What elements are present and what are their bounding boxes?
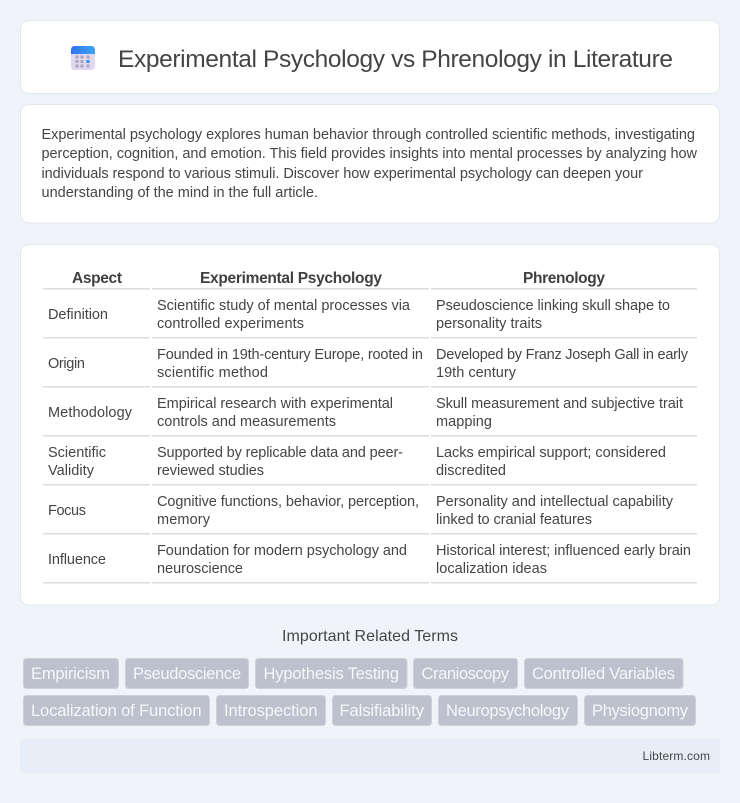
tag: Localization of Function: Localization of Function [31,702,202,720]
row: Methodology: controls and measurements [157,414,336,430]
related terms tags [24,658,696,726]
row: Influence: Historical interest; influenced early brain [436,543,691,559]
row: Definition: Definition [48,307,108,323]
row: Methodology: Methodology [48,405,133,421]
row: Definition: personality traits [436,316,542,332]
tag: Pseudoscience [126,658,248,688]
tag: Falsifiability: Falsifiability [340,702,425,720]
row: Focus: Focus [48,503,86,519]
row: Origin: Origin [48,356,85,372]
row: Origin [43,347,697,388]
row: Focus: memory [157,512,211,528]
table header: Phrenology [523,270,605,287]
row: Influence: localization ideas [436,561,547,577]
row: Scientific Validity: Lacks empirical support; considered [436,445,666,461]
row: Definition: controlled experiments [157,316,304,332]
row: Origin: 19th century [436,365,517,381]
tag: Physiognomy [584,696,696,726]
intro text: understanding of the mind in the full article. [42,185,318,201]
row: Influence [43,543,697,584]
row: Focus: Personality and intellectual capability [436,494,674,510]
title: Experimental Psychology vs Phrenology in Literature [118,46,673,73]
table header: Experimental Psychology [200,270,382,287]
row: Influence: Foundation for modern psychology and [157,543,407,559]
tag: Empiricism: Empiricism [31,665,110,683]
tag: Introspection: Introspection [224,702,318,720]
row: Focus [43,494,697,534]
row: Scientific Validity: reviewed studies [157,463,264,479]
tag: Pseudoscience: Pseudoscience [133,665,241,683]
row: Methodology: Skull measurement and subjective trait [436,396,683,412]
tag: Neuropsychology [438,696,578,726]
panel: introduction [20,104,720,223]
tag: Introspection [216,696,326,726]
table header [43,270,697,290]
tag: Hypothesis Testing: Hypothesis Testing [264,665,399,683]
footer [20,739,720,773]
heading: related terms: Important Related Terms [282,628,458,645]
table header: Aspect [72,270,122,287]
row: Methodology [43,396,697,436]
intro text [42,127,698,201]
tag: Controlled Variables [524,658,683,688]
row: Focus: linked to cranial features [436,512,592,528]
row: Focus: Cognitive functions, behavior, perception, [157,494,419,510]
row: Scientific Validity: Supported by replicable data and peer- [157,445,403,461]
row: Origin: Developed by Franz Joseph Gall in early [436,347,689,363]
tag: Falsifiability [332,696,432,726]
row: Definition: Pseudoscience linking skull shape to [436,298,670,314]
tag: Cranioscopy [414,658,518,688]
intro text: Experimental psychology explores human behavior through controlled scientific methods, investigating [42,127,695,143]
row: Scientific Validity: Scientific [48,445,106,461]
tag: Controlled Variables: Controlled Variables [532,665,675,683]
tag: Neuropsychology: Neuropsychology [446,702,570,720]
panel: comparison table [20,244,720,605]
row: Methodology: Empirical research with experimental [157,396,393,412]
row: Influence: Influence [48,552,106,568]
title panel [20,20,720,94]
row: Scientific Validity: Validity [48,463,95,479]
row: Scientific Validity: discredited [436,463,506,479]
row: Origin: scientific method [157,365,268,381]
tag: Hypothesis Testing [256,658,407,688]
row: Methodology: mapping [436,414,492,430]
tag: Empiricism [24,658,118,688]
intro text: individuals respond to various stimuli. Discover how experimental psychology can deepen your [42,166,643,182]
row: Scientific Validity [43,445,697,486]
row: Origin: Founded in 19th-century Europe, rooted in [157,347,423,363]
tag: Cranioscopy: Cranioscopy [422,665,510,683]
tag: Physiognomy: Physiognomy [592,702,689,720]
tag: Localization of Function [24,696,210,726]
row: Definition [43,298,697,338]
footer: Libterm.com [642,749,710,763]
icon: calendar [71,46,95,70]
intro text: perception, cognition, and emotion. This field provides insights into mental processes by analyzing how [42,146,698,162]
row: Definition: Scientific study of mental processes via [157,298,411,314]
row: Influence: neuroscience [157,561,243,577]
